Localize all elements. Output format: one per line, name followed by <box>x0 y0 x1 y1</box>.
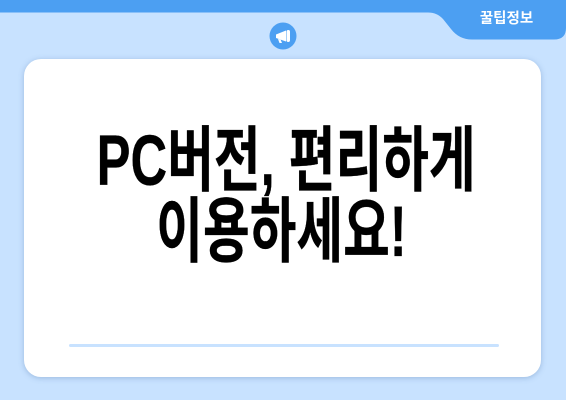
panel: main card <box>24 59 541 377</box>
top banner band <box>0 0 566 40</box>
tag label: 꿀팁정보 <box>480 11 533 27</box>
icon: megaphone <box>270 22 296 50</box>
title: PC버전, 편리하게 <box>97 122 476 201</box>
divider bar <box>69 344 499 347</box>
title: 이용하세요! <box>156 193 407 272</box>
title <box>97 122 476 272</box>
